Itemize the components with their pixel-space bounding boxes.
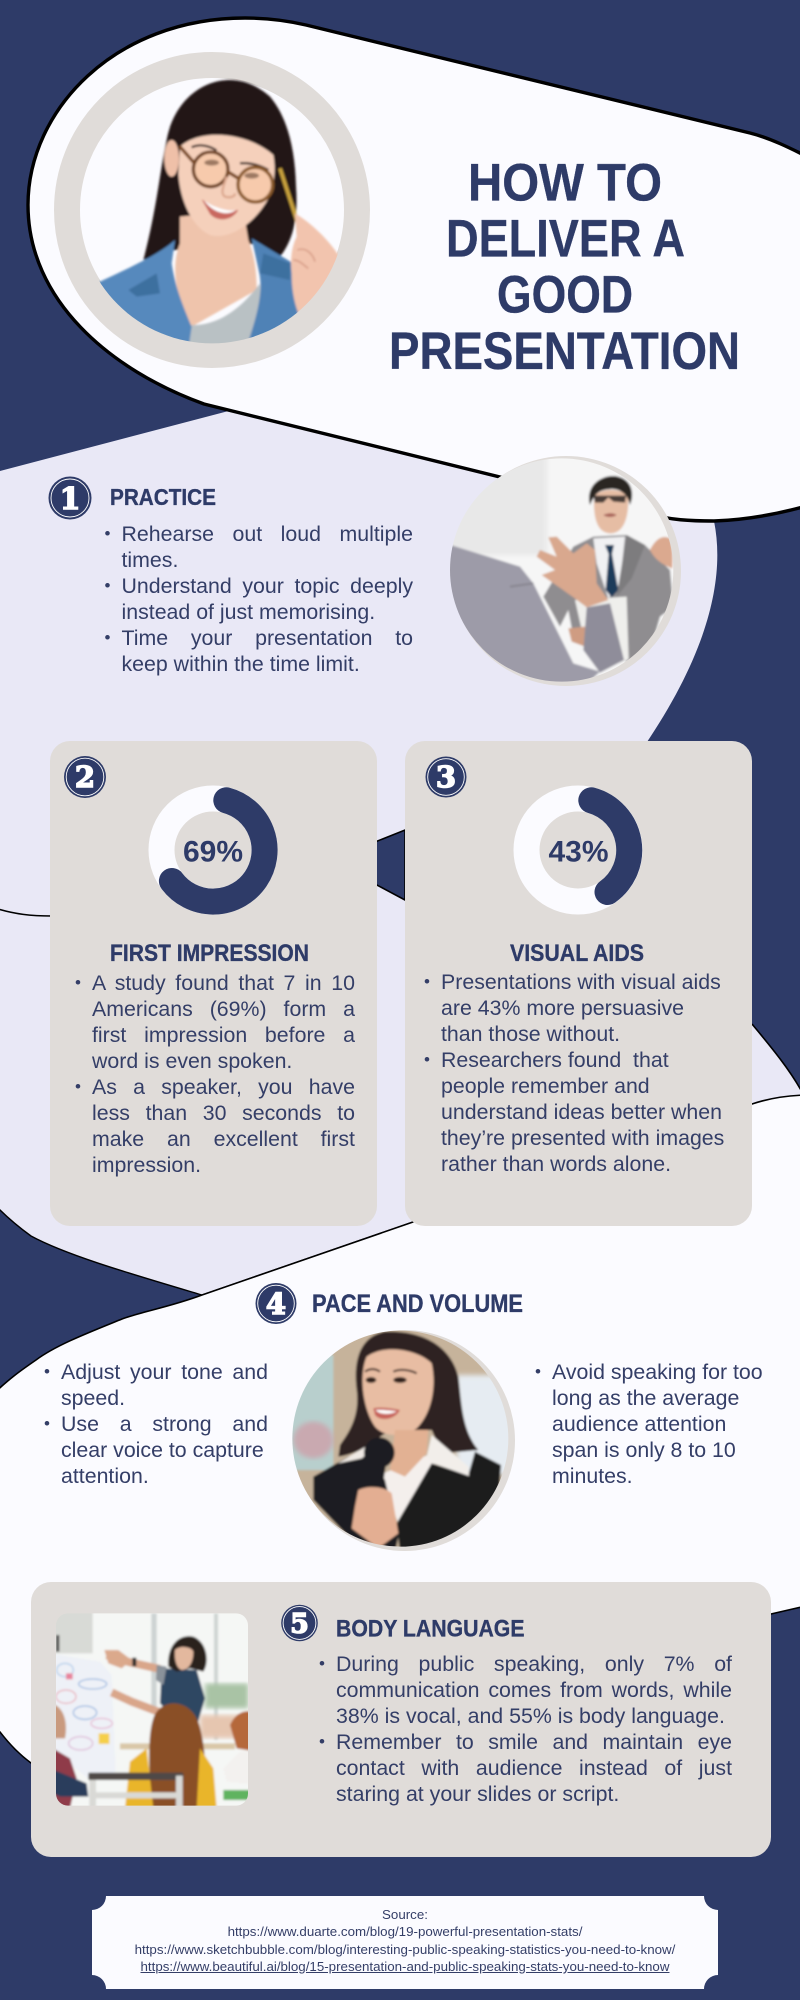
panel: body language: • bbox=[319, 1654, 325, 1673]
panel: visual aids bbox=[405, 741, 752, 1226]
number badge 1 bbox=[48, 476, 92, 520]
title: HOW TO bbox=[468, 154, 662, 212]
number badge 5: 5 bbox=[290, 1609, 309, 1640]
heading: practice: PRACTICE bbox=[110, 484, 216, 510]
panel: pace and volume: • bbox=[44, 1362, 50, 1381]
heading: first impression: FIRST IMPRESSION bbox=[110, 940, 309, 967]
photo: presenter at whiteboard bbox=[56, 1614, 248, 1806]
number badge 4: 4 bbox=[266, 1287, 286, 1321]
text: body language bullets: communication comes from words, while bbox=[336, 1678, 732, 1702]
photo: woman with microphone bbox=[285, 1320, 518, 1553]
text: pace right bullets: span is only 8 to 10 bbox=[552, 1438, 736, 1462]
panel: pace and volume bbox=[44, 1283, 763, 1551]
text: pace right bullets: minutes. bbox=[552, 1464, 633, 1488]
text: practice bullets: Rehearse out loud multiple bbox=[122, 522, 413, 546]
source link 3: https://www.beautiful.ai/blog/15-presentation-and-public-speaking-stats-you-need-to-know bbox=[140, 1959, 669, 1974]
number badge 4 bbox=[256, 1283, 296, 1324]
panel: header bbox=[54, 52, 740, 381]
title bbox=[389, 154, 740, 381]
number badge 3: 3 bbox=[436, 760, 456, 794]
text: first impression bullets: word is even spoken. bbox=[92, 1049, 292, 1073]
text: visual aids bullets bbox=[424, 970, 724, 1176]
text: practice bullets: times. bbox=[122, 548, 178, 572]
text: practice bullets: instead of just memorising. bbox=[122, 600, 375, 624]
title: PRESENTATION bbox=[389, 322, 740, 381]
text: pace left bullets: Adjust your tone and bbox=[61, 1360, 268, 1384]
text: pace right bullets: Avoid speaking for too bbox=[552, 1360, 763, 1384]
text: practice bullets: keep within the time limit. bbox=[122, 652, 360, 676]
number badge 3 bbox=[426, 756, 466, 798]
text: visual aids bullets: understand ideas better when bbox=[441, 1100, 722, 1124]
panel: practice: • bbox=[104, 628, 110, 647]
text: first impression bullets: make an excellent first bbox=[92, 1127, 355, 1151]
text: pace left bullets: Use a strong and bbox=[61, 1412, 268, 1436]
panel: visual aids: • bbox=[424, 1050, 430, 1069]
number badge 2 bbox=[64, 756, 106, 798]
number badge 2: 2 bbox=[75, 760, 95, 794]
text: visual aids bullets: than those without. bbox=[441, 1022, 620, 1046]
donut chart 43%: 43% bbox=[548, 836, 609, 868]
photo: man in suit presenting bbox=[450, 456, 681, 686]
text: visual aids bullets: people remember and bbox=[441, 1074, 650, 1098]
text: pace left bullets: attention. bbox=[61, 1464, 149, 1488]
text: body language bullets: 38% is vocal, and 55% is body language. bbox=[336, 1704, 725, 1728]
text: pace right bullets: audience attention bbox=[552, 1412, 726, 1436]
text: visual aids bullets: Presentations with visual aids bbox=[441, 970, 721, 994]
donut chart 43% bbox=[526, 798, 630, 902]
text: first impression bullets: As a speaker, you have bbox=[92, 1075, 355, 1099]
text: pace left bullets: clear voice to capture bbox=[61, 1438, 264, 1462]
text: first impression bullets: first impression before a bbox=[92, 1023, 355, 1047]
panel: visual aids: • bbox=[424, 972, 430, 991]
text: body language bullets: staring at your slides or script. bbox=[336, 1782, 619, 1806]
panel: practice bbox=[48, 456, 681, 686]
text: pace left bullets bbox=[44, 1360, 268, 1488]
heading: visual aids: VISUAL AIDS bbox=[510, 940, 644, 967]
title: DELIVER A bbox=[446, 210, 685, 268]
number badge 5 bbox=[281, 1605, 318, 1641]
text: visual aids bullets: rather than words alone. bbox=[441, 1152, 671, 1176]
number badge 1: 1 bbox=[60, 482, 80, 517]
donut chart 69%: 69% bbox=[183, 836, 243, 868]
text: first impression bullets: A study found that 7 in 10 bbox=[92, 971, 355, 995]
text: first impression bullets bbox=[75, 971, 355, 1177]
panel: body language bbox=[31, 1582, 771, 1857]
donut chart 69% bbox=[162, 798, 265, 902]
panel: practice: • bbox=[104, 524, 110, 543]
text: body language bullets bbox=[319, 1652, 732, 1806]
card background bbox=[50, 741, 377, 1226]
title: GOOD bbox=[497, 266, 633, 324]
card background bbox=[405, 741, 752, 1226]
panel: first impression: • bbox=[75, 1077, 81, 1096]
text: pace right bullets: long as the average bbox=[552, 1386, 739, 1410]
photo ring: smiling woman with glasses bbox=[67, 65, 357, 355]
text: first impression bullets: impression. bbox=[92, 1153, 201, 1177]
text: visual aids bullets: Researchers found that bbox=[441, 1048, 669, 1072]
text: visual aids bullets: are 43% more persuasive bbox=[441, 996, 684, 1020]
text: practice bullets bbox=[104, 522, 413, 676]
text: practice bullets: Time your presentation to bbox=[122, 626, 413, 650]
source link 2: https://www.sketchbubble.com/blog/interesting-public-speaking-statistics-you-need-to-know/ bbox=[135, 1942, 675, 1957]
card background bbox=[31, 1582, 771, 1857]
text: first impression bullets: Americans (69%) form a bbox=[92, 997, 355, 1021]
panel: pace and volume: • bbox=[44, 1414, 50, 1433]
panel: body language: • bbox=[319, 1732, 325, 1751]
panel: practice: • bbox=[104, 576, 110, 595]
text: pace left bullets: speed. bbox=[61, 1386, 125, 1410]
text: pace right bullets bbox=[535, 1360, 763, 1488]
text: body language bullets: contact with audience instead of just bbox=[336, 1756, 732, 1780]
text: body language bullets: During public speaking, only 7% of bbox=[336, 1652, 732, 1676]
panel: first impression: • bbox=[75, 973, 81, 992]
heading: body language: BODY LANGUAGE bbox=[336, 1616, 524, 1642]
heading: pace and volume: PACE AND VOLUME bbox=[312, 1290, 523, 1318]
panel: sources bbox=[92, 1896, 718, 1989]
text: body language bullets: Remember to smile and maintain eye bbox=[336, 1730, 732, 1754]
panel: first impression bbox=[50, 741, 377, 1226]
source heading: Source: bbox=[382, 1907, 428, 1922]
text: visual aids bullets: they’re presented with images bbox=[441, 1126, 724, 1150]
text: first impression bullets: less than 30 seconds to bbox=[92, 1101, 355, 1125]
source link 1: https://www.duarte.com/blog/19-powerful-presentation-stats/ bbox=[228, 1924, 582, 1939]
panel: pace and volume: • bbox=[535, 1362, 541, 1381]
text: practice bullets: Understand your topic deeply bbox=[122, 574, 413, 598]
